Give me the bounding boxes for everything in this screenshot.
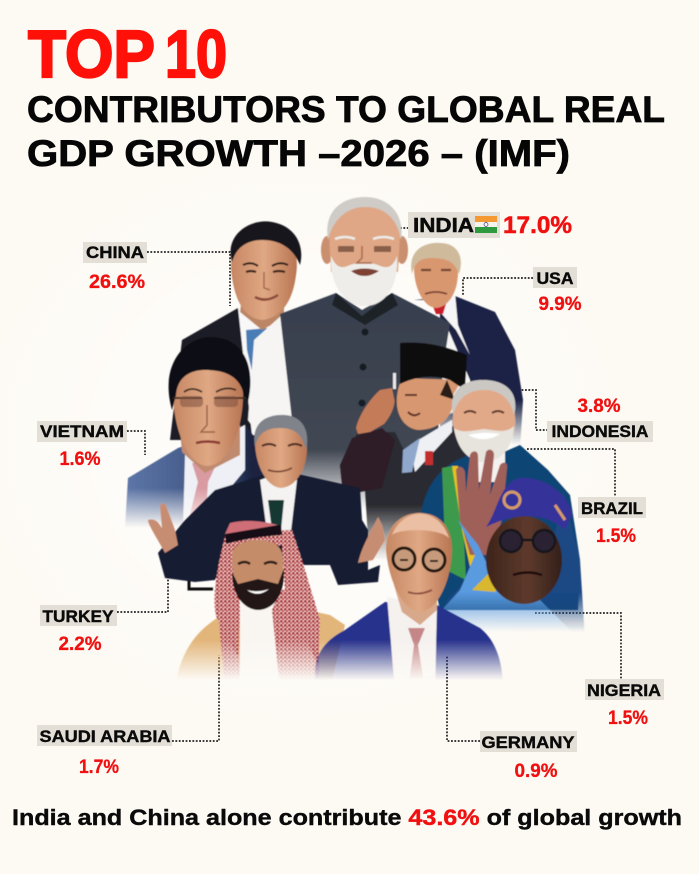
label: USA: 9.9% bbox=[538, 294, 582, 315]
portrait: Germany bbox=[315, 513, 503, 690]
label: Vietnam: 1.6% bbox=[60, 449, 101, 470]
label: Turkey: TURKEY bbox=[42, 607, 114, 626]
label: India: 17.0% bbox=[503, 212, 572, 239]
label: Nigeria: 1.5% bbox=[608, 708, 648, 729]
heading: top 10: 10 bbox=[165, 17, 227, 92]
label: Brazil: BRAZIL bbox=[581, 499, 643, 518]
label: China: 26.6% bbox=[89, 272, 145, 293]
label: Indonesia bbox=[547, 396, 653, 442]
label: USA: USA bbox=[536, 269, 574, 288]
label: India: INDIA bbox=[413, 215, 474, 237]
portrait: USA bbox=[411, 243, 523, 450]
footer statement: India and China alone contribute 43.6% of global growth bbox=[12, 805, 682, 830]
label: Brazil: 1.5% bbox=[596, 526, 636, 547]
label: Brazil bbox=[578, 497, 646, 547]
label: Nigeria bbox=[585, 679, 664, 729]
heading: gdp line: GDP GROWTH –2026 – (IMF) bbox=[27, 133, 570, 174]
black corner fragment bbox=[189, 580, 213, 589]
portrait group: leaders bbox=[125, 197, 585, 690]
label: Indonesia: 3.8% bbox=[578, 396, 621, 417]
label: Turkey bbox=[40, 605, 117, 655]
portrait: Turkey bbox=[148, 415, 385, 585]
portrait: India bbox=[248, 197, 472, 520]
label: Vietnam bbox=[37, 421, 127, 470]
label: Germany bbox=[480, 731, 577, 782]
title bbox=[27, 17, 665, 174]
label: USA bbox=[533, 267, 582, 315]
label: Saudi Arabia: 1.7% bbox=[79, 757, 119, 778]
label: Vietnam: VIETNAM bbox=[40, 422, 124, 441]
label: Germany: 0.9% bbox=[514, 761, 558, 782]
portrait: Nigeria bbox=[442, 477, 584, 630]
heading: top 10: TOP bbox=[28, 17, 155, 92]
portrait: Vietnam bbox=[125, 337, 264, 526]
label: Turkey: 2.2% bbox=[58, 634, 102, 655]
portrait: Saudi Arabia bbox=[176, 521, 345, 690]
label: Saudi Arabia bbox=[37, 725, 172, 778]
label: Saudi Arabia: SAUDI ARABIA bbox=[40, 727, 170, 746]
icon: India flag bbox=[475, 216, 497, 233]
leader lines bbox=[117, 228, 621, 741]
portrait: Indonesia bbox=[340, 342, 468, 558]
label: India bbox=[408, 212, 572, 239]
label: Indonesia: INDONESIA bbox=[552, 422, 648, 441]
label: Germany: GERMANY bbox=[482, 733, 575, 752]
heading: contributors line: CONTRIBUTORS TO GLOBAL REAL bbox=[27, 89, 665, 130]
portrait: China bbox=[170, 221, 301, 470]
label: China: CHINA bbox=[86, 243, 144, 262]
label: Nigeria: NIGERIA bbox=[587, 681, 661, 700]
label: China bbox=[83, 242, 147, 293]
portrait: Brazil bbox=[420, 380, 580, 610]
